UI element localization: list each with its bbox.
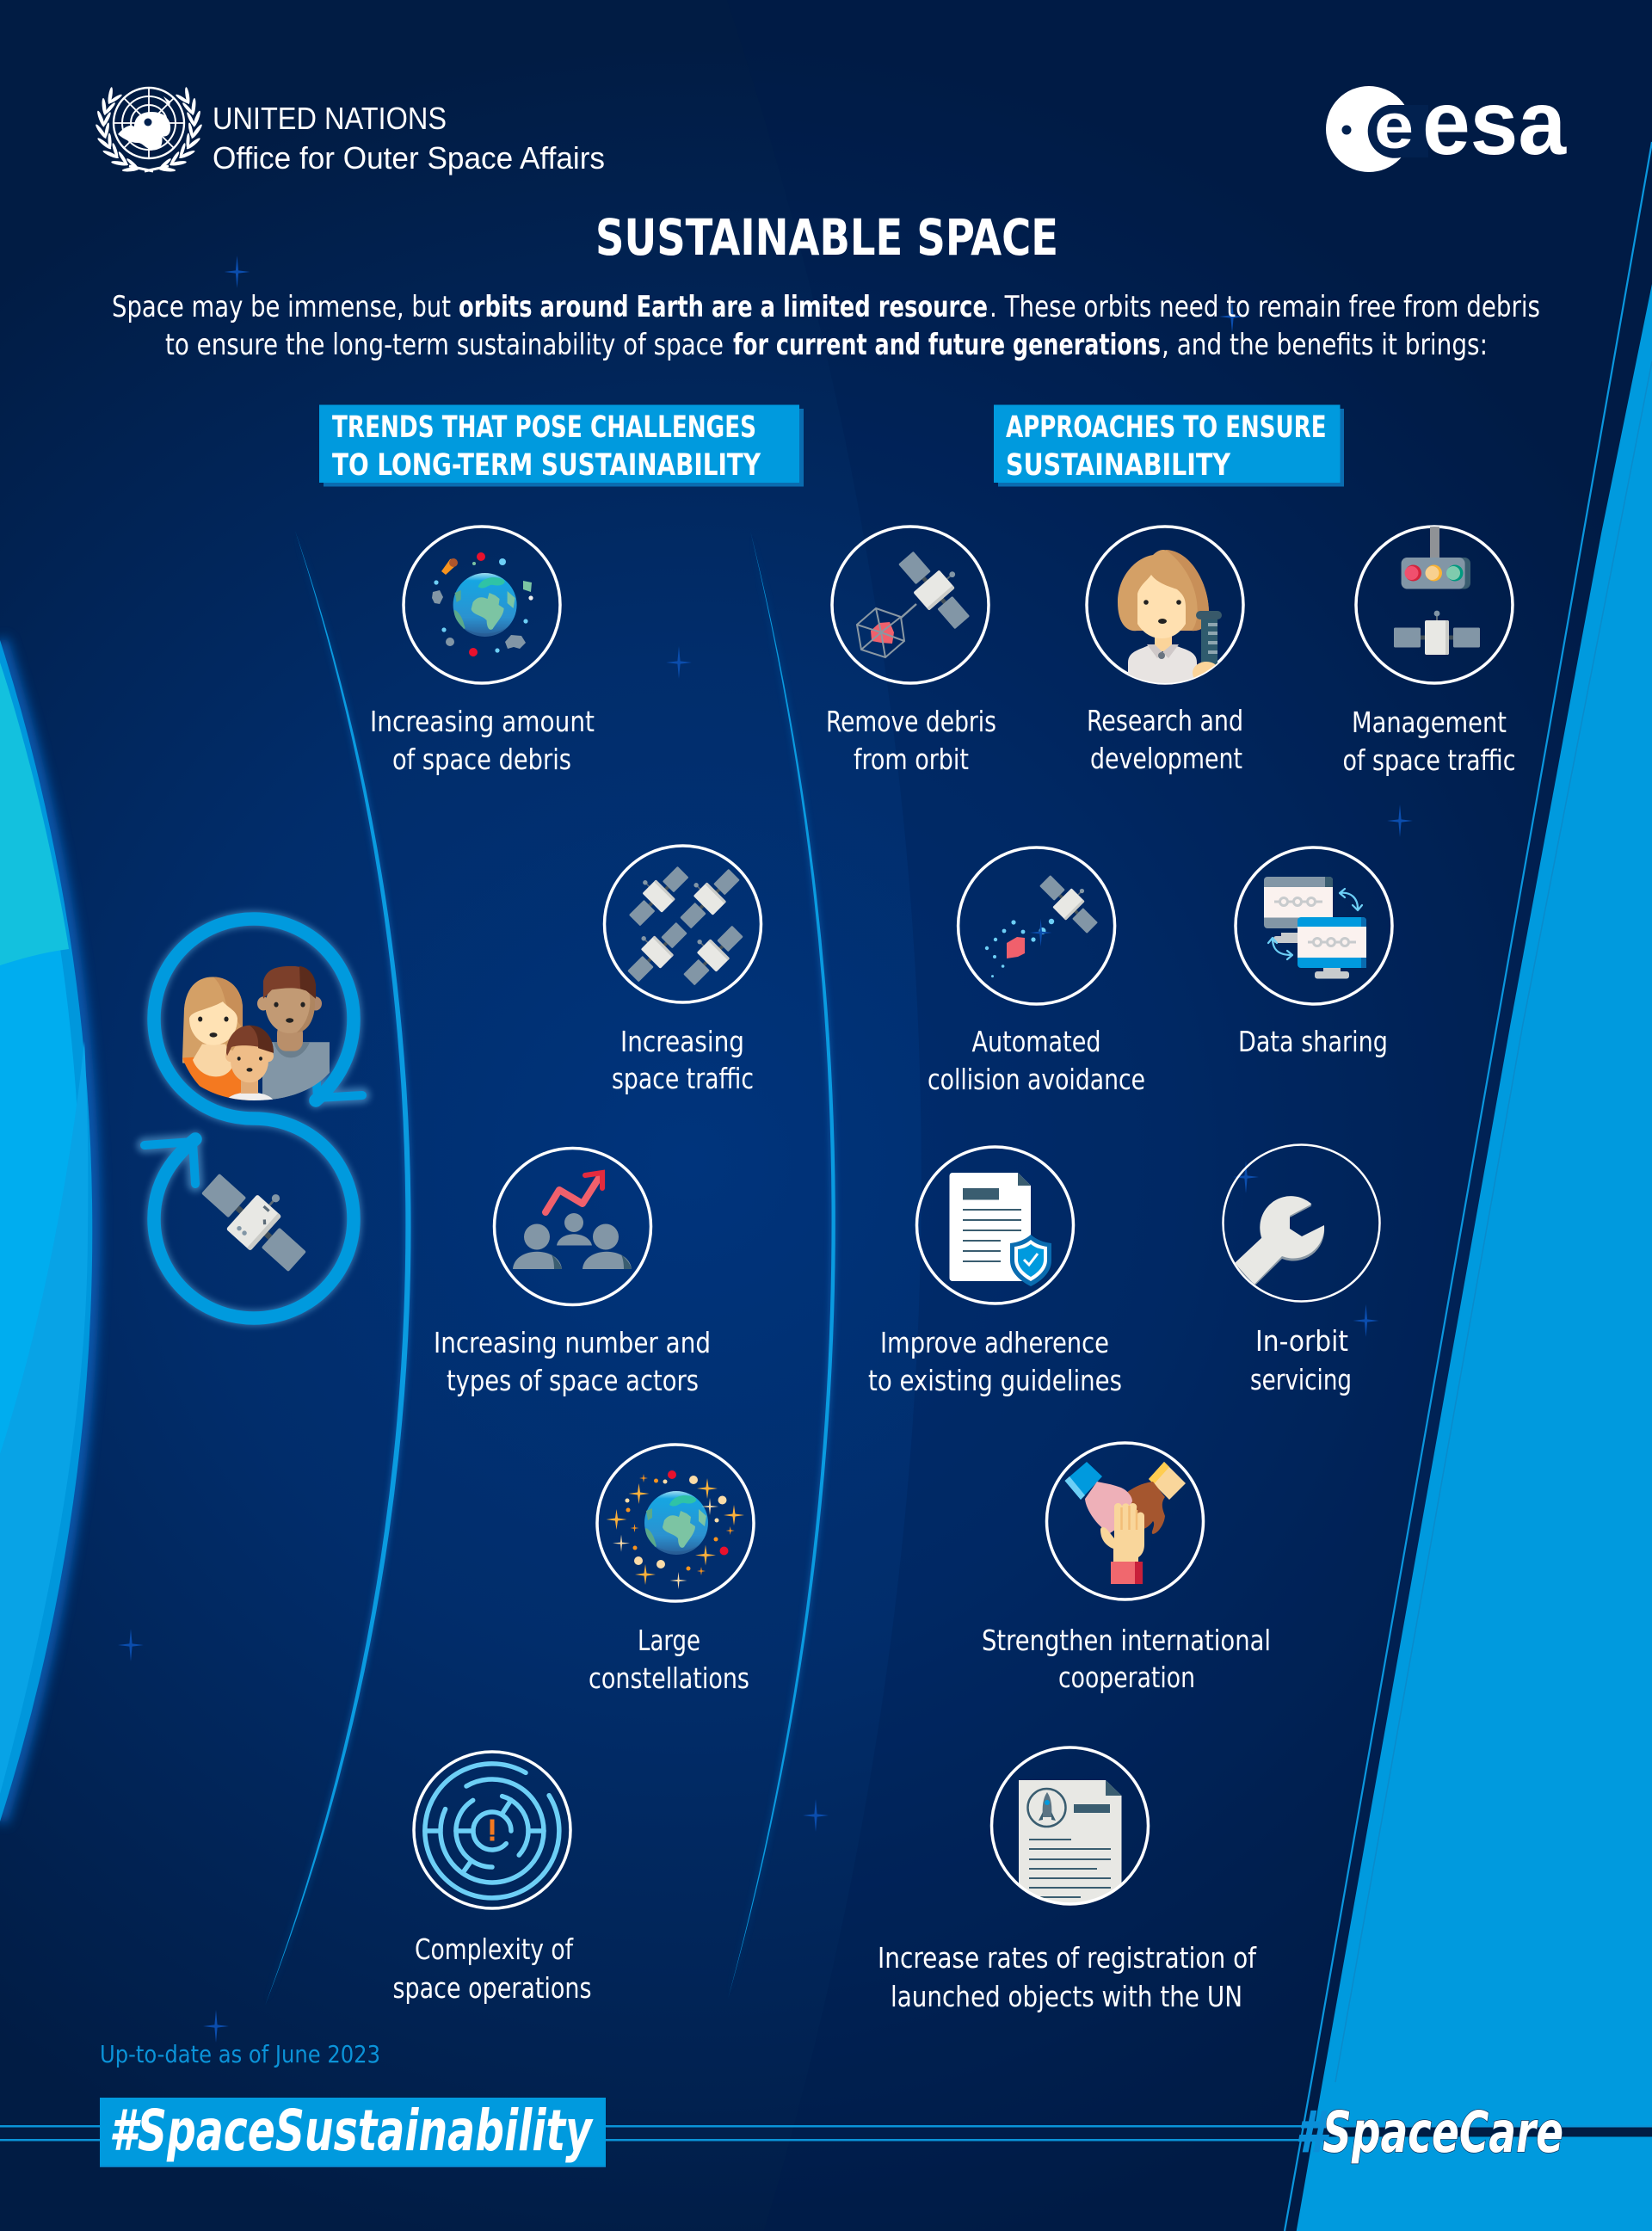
label: cooperation: [1058, 1661, 1195, 1694]
label: types of space actors: [447, 1364, 699, 1397]
intro text: for current and future generations: [733, 328, 1161, 362]
label: [434, 1326, 711, 1397]
intro text: orbits around Earth are a limited resource: [459, 290, 988, 324]
label: of space debris: [392, 743, 571, 776]
label: [1087, 704, 1243, 775]
icon: two monitors: [1264, 877, 1366, 979]
label: constellations: [589, 1661, 749, 1695]
intro text: . These orbits need to remain free from debris: [989, 290, 1540, 324]
heading: approaches: SUSTAINABILITY: [1006, 448, 1231, 483]
icon: maze: [425, 1764, 559, 1898]
item: collision avoidance: [928, 847, 1145, 1096]
right blue wedge: [1285, 142, 1652, 2231]
right orbit line: [728, 531, 835, 1999]
label: [612, 1025, 754, 1095]
icon: satellite: [194, 1156, 322, 1279]
date note: Up-to-date as of June 2023: [100, 2040, 380, 2068]
loop arrow: [145, 919, 362, 1318]
label: Complexity of: [415, 1932, 574, 1966]
label: of space traffic: [1342, 743, 1516, 777]
intro text: to ensure the long-term sustainability of space: [165, 328, 724, 362]
label: [392, 1932, 592, 2005]
icon: four satellites: [618, 857, 748, 989]
label: [826, 705, 996, 776]
label: space traffic: [612, 1062, 754, 1095]
label: Large: [638, 1624, 700, 1657]
label: Increasing amount: [370, 705, 595, 738]
UN logo: Office for Outer Space Affairs: [213, 140, 605, 176]
label: servicing: [1250, 1363, 1352, 1396]
icon: wrench: [1235, 1196, 1324, 1286]
label: Improve adherence: [880, 1326, 1109, 1359]
icon: family: [182, 966, 330, 1102]
label: Management: [1352, 706, 1507, 739]
label: Strengthen international: [982, 1624, 1271, 1657]
label: [589, 1624, 749, 1695]
label: In-orbit: [1255, 1324, 1348, 1358]
icon: scientist: [1118, 550, 1222, 684]
icon: debris around Earth: [432, 552, 533, 656]
item: traffic management: [1342, 525, 1516, 777]
heading: trends: TO LONG-TERM SUSTAINABILITY: [332, 448, 761, 483]
icon: satellite avoiding debris: [985, 866, 1107, 977]
label: [982, 1624, 1271, 1694]
label: [878, 1941, 1257, 2013]
left orbit line: [265, 531, 411, 2006]
label: to existing guidelines: [868, 1364, 1122, 1397]
label: Remove debris: [826, 705, 996, 738]
item: complexity: [392, 1752, 592, 2005]
label: space operations: [392, 1971, 592, 2005]
item: research and development: [1087, 527, 1243, 775]
heading: approaches: APPROACHES TO ENSURE: [1006, 410, 1327, 445]
heading: approaches: [994, 404, 1344, 487]
star sparkles: [118, 256, 1413, 2043]
icon: people with rising arrow: [513, 1173, 632, 1269]
item: international cooperation: [982, 1443, 1271, 1694]
icon: traffic light and satellite: [1394, 525, 1480, 655]
item: large constellations: [589, 1445, 754, 1695]
label: [370, 705, 595, 776]
illustration: sustainability loop: [145, 919, 362, 1318]
heading: trends: [319, 404, 804, 487]
item: space actors: [434, 1148, 711, 1397]
item: guidelines: [868, 1147, 1122, 1397]
footer lines: [0, 2125, 1652, 2141]
ESA logo: [1326, 72, 1567, 174]
label: collision avoidance: [928, 1063, 1145, 1096]
title: SUSTAINABLE SPACE: [595, 208, 1058, 267]
item: registration: [878, 1747, 1257, 2013]
hashtag: SpaceCare: SpaceCare: [1322, 2099, 1563, 2166]
ESA logo: e: [1374, 90, 1414, 162]
hashtag: SpaceSustainability: #SpaceSustainability: [109, 2098, 594, 2164]
icon: registration document: [1019, 1780, 1122, 1910]
intro text: Space may be immense, but: [112, 290, 451, 324]
UN logo: [94, 85, 605, 177]
heading: trends: TRENDS THAT POSE CHALLENGES: [332, 410, 756, 445]
item: space traffic: [604, 846, 761, 1095]
label: Increasing number and: [434, 1326, 711, 1359]
label: Increase rates of registration of: [878, 1941, 1257, 1975]
intro text: [112, 290, 1540, 362]
ESA logo: esa: [1422, 72, 1567, 174]
UN logo: UNITED NATIONS: [213, 101, 447, 136]
icon: UN emblem: [94, 85, 204, 177]
item: data sharing: [1236, 847, 1392, 1058]
hashtag: SpaceCare: #: [1296, 2099, 1332, 2166]
label: [1250, 1324, 1352, 1396]
label: Data sharing: [1238, 1025, 1388, 1058]
label: Research and: [1087, 704, 1243, 737]
item: in-orbit servicing: [1224, 1144, 1380, 1396]
icon: Earth with stars: [606, 1470, 744, 1589]
label: [1342, 706, 1516, 777]
left planet arc: [0, 640, 92, 1821]
label: [868, 1326, 1122, 1397]
icon: satellite with net: [857, 540, 983, 657]
item: amount of debris: [370, 527, 595, 776]
label: from orbit: [854, 743, 969, 776]
label: launched objects with the UN: [891, 1980, 1242, 2013]
icon: document with shield: [950, 1173, 1051, 1286]
intro text: , and the benefits it brings:: [1162, 328, 1488, 362]
label: [928, 1025, 1145, 1096]
label: development: [1090, 742, 1242, 775]
label: Automated: [972, 1025, 1101, 1058]
item: remove debris: [826, 527, 996, 776]
icon: joined hands: [1065, 1462, 1186, 1584]
label: Increasing: [620, 1025, 744, 1058]
